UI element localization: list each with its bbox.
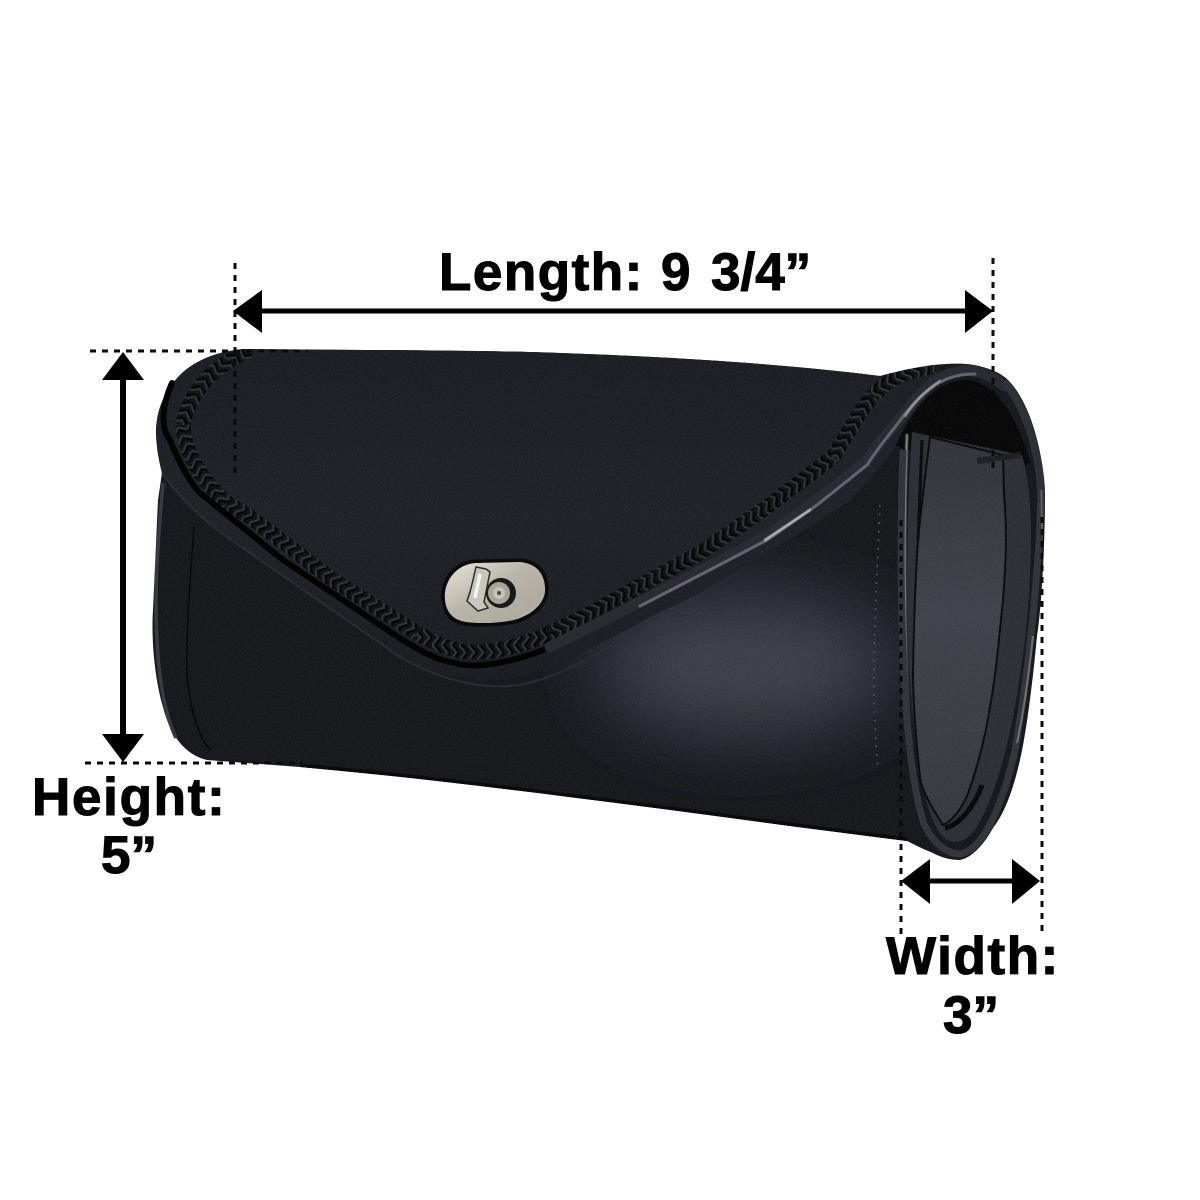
height label [32,768,226,885]
end pocket panel [905,432,1031,842]
dotted guide lines [85,258,1042,935]
length label: Length: [439,243,660,302]
clasp hub [486,578,516,608]
width arrow [901,859,1040,904]
height label: Height: [32,768,226,827]
right edge of flap rim [1004,382,1041,490]
flap [156,349,935,680]
body left seam and stitching [156,483,210,750]
bag body [140,340,1060,870]
body right stitching [874,505,880,770]
flap outer seam [162,473,660,686]
end panel interior [896,380,1030,470]
height label: 5” [101,826,157,885]
flap piping [164,370,1004,666]
clasp lever [467,567,490,611]
height arrow [102,352,144,762]
length arrow [233,290,993,333]
width label [886,927,1060,1045]
length label: 3/4” [711,243,811,302]
bag illustration [140,340,1060,870]
width label: 3” [943,986,999,1045]
twist lock clasp [443,560,547,625]
braided trim [183,350,935,652]
length label: 9 [661,243,705,302]
width label: Width: [886,927,1060,986]
leather grain [150,345,1050,865]
end rim piping [901,450,1042,854]
